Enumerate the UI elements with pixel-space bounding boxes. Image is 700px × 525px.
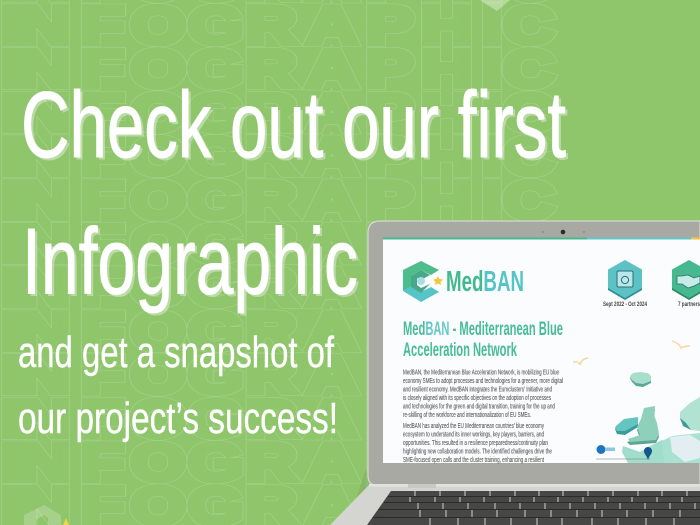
background pattern: repeated outlined INFOGRAPHIC: INFOGRAPHIC (1, 259, 554, 317)
partner logo (596, 445, 650, 459)
icon: calendar hexagon (608, 260, 642, 300)
background pattern: repeated outlined INFOGRAPHIC: INFOGRAPHIC (1, 172, 554, 230)
background pattern: repeated outlined INFOGRAPHIC: INFOGRAPHIC (1, 84, 554, 142)
United Kingdom (627, 409, 659, 445)
background pattern: repeated outlined INFOGRAPHIC: INFOGRAPHIC (1, 303, 554, 361)
background pattern: repeated outlined INFOGRAPHIC: INFOGRAPHIC (1, 303, 554, 361)
background pattern: repeated outlined INFOGRAPHIC: INFOGRAPHIC (1, 346, 554, 404)
subheading (18, 328, 338, 443)
heading line 2 with shadow: Infographic (22, 208, 358, 314)
body text: MedBAN, the Mediterranean Blue Acceleration Network, is mobilizing EU blue (403, 370, 559, 376)
MedBAN wordmark: MedBAN (446, 266, 524, 298)
subheading: and get a snapshot of (18, 328, 335, 377)
background pattern: repeated outlined INFOGRAPHIC: INFOGRAPHIC (1, 215, 554, 273)
Scandinavia (680, 397, 700, 431)
colour bar (383, 238, 700, 240)
background pattern: repeated outlined INFOGRAPHIC: INFOGRAPHIC (1, 259, 554, 317)
background pattern: repeated outlined INFOGRAPHIC: INFOGRAPHIC (1, 128, 554, 186)
subheading: our project’s success! (18, 394, 338, 443)
body text: MedBAN has analyzed the EU Mediterranean countries’ blue economy (403, 423, 544, 430)
body text: highlighting new collaboration models. The identified challenges drive the (403, 448, 552, 456)
body text: ecosystem to understand its inner workings, key players, barriers, and (403, 432, 544, 438)
project title: MedBAN - Mediterranean Blue (403, 319, 563, 340)
keyboard (367, 491, 700, 525)
background pattern: repeated outlined INFOGRAPHIC: INFOGRAPHIC (1, 128, 554, 186)
logo fragment bottom left (24, 505, 69, 525)
birds (573, 341, 690, 365)
background pattern: repeated outlined INFOGRAPHIC: INFOGRAPHIC (1, 40, 554, 98)
laptop base (330, 484, 700, 525)
laptop (330, 221, 700, 525)
background pattern: repeated outlined INFOGRAPHIC: INFOGRAPHIC (1, 84, 554, 142)
icon: handshake hexagon (672, 260, 700, 300)
screen (383, 238, 700, 464)
body text: economy SMEs to adopt processes and technologies for a greener, more digital (403, 378, 563, 385)
background pattern: repeated outlined INFOGRAPHIC: INFOGRAPHIC (1, 390, 554, 448)
project title (403, 319, 563, 361)
France (622, 440, 672, 463)
label: dates: Sept 2022 - Oct 2024 (603, 302, 647, 308)
project title: Acceleration Network (403, 340, 517, 361)
background pattern: repeated outlined INFOGRAPHIC: INFOGRAPHIC (1, 215, 554, 273)
background pattern: repeated outlined INFOGRAPHIC: INFOGRAPHIC (1, 172, 554, 230)
background pattern: repeated outlined INFOGRAPHIC (1, 0, 554, 525)
heading line 2 with shadow: Infographic (24, 211, 360, 316)
background pattern: repeated outlined INFOGRAPHIC: INFOGRAPHIC (1, 40, 554, 98)
body text: opportunities. This resulted in a resilience preparedness/continuity plan (403, 440, 548, 447)
mainland Europe (662, 433, 700, 463)
body text: and resilient economy. MedBAN integrates the Euroclusters’ Initiative and (403, 386, 552, 394)
camera (542, 230, 585, 234)
logo fragment top (480, 0, 510, 11)
screen lid bezel (368, 221, 700, 485)
background pattern: repeated outlined INFOGRAPHIC: INFOGRAPHIC (1, 346, 554, 404)
map pin (644, 447, 652, 460)
body text: re-skilling of the workforce and internationalization of EU SMEs. (403, 412, 531, 419)
MedBAN logo (403, 261, 443, 302)
background pattern: repeated outlined INFOGRAPHIC: INFOGRAPHIC (1, 434, 554, 492)
body text (403, 370, 563, 464)
body text: and technologies for the green and digital transition, training for the up and (403, 404, 555, 410)
body text: SME-focused open calls and the cluster training, enhancing a resilient (403, 457, 544, 464)
laptop shadow (355, 468, 370, 502)
background pattern: repeated outlined INFOGRAPHIC: INFOGRAPHIC (1, 390, 554, 448)
background pattern: repeated outlined INFOGRAPHIC: INFOGRAPHIC (1, 434, 554, 492)
map of Europe (615, 372, 700, 463)
Ireland (615, 420, 638, 435)
Iceland (630, 374, 651, 387)
body text: is closely aligned with its specific objectives on the adoption of processes (403, 395, 551, 402)
hinge strip (369, 484, 700, 488)
